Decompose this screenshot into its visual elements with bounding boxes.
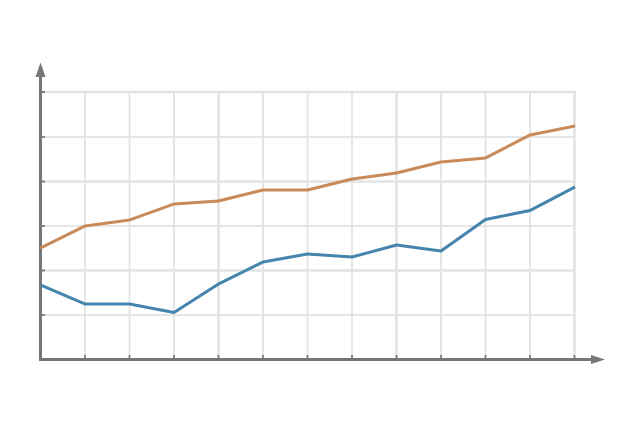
x axis with arrow and tick marks <box>39 355 605 364</box>
blue data line <box>40 187 575 312</box>
orange data line <box>40 126 575 248</box>
chart grid <box>40 91 576 359</box>
y axis with arrow and tick marks <box>36 62 46 360</box>
